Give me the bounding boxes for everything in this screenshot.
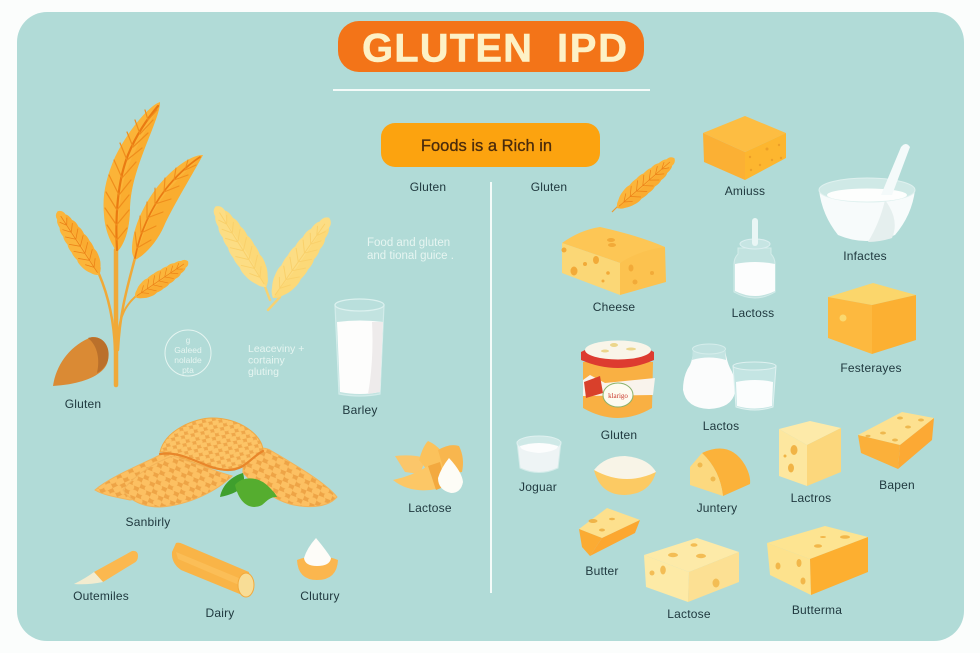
icon: dairy roll <box>172 543 254 597</box>
icon: yellow pieces and clove <box>393 441 463 493</box>
icon: small wheat ear <box>611 151 681 215</box>
label: Gluten <box>65 397 101 411</box>
food item: milk bottle <box>732 218 775 320</box>
label: Infactes <box>843 249 887 263</box>
icon: labelled jar: klarigo <box>608 392 628 400</box>
icon: stick <box>74 551 138 584</box>
text block: circled note <box>165 330 211 376</box>
food item: grain mound <box>95 418 337 529</box>
icon: pale cheese block <box>779 421 841 486</box>
food item: half bowl <box>594 456 656 495</box>
food item: yogurt bowl with spoon <box>819 144 915 263</box>
food item: yellow cube <box>828 283 916 375</box>
food item: jar <box>581 340 655 442</box>
text block: food guide note: Food and gluten <box>367 237 450 249</box>
label: Joguar <box>519 480 557 494</box>
label: Lactoss <box>732 306 774 320</box>
text block: circled note: nolalde <box>174 355 202 365</box>
food item: butter wedge <box>579 508 640 578</box>
label: Lactros <box>791 491 831 505</box>
sub-icon: tall curved ear <box>103 102 160 252</box>
food item: almond seed <box>53 337 109 411</box>
food item: lactose pieces <box>393 441 463 515</box>
text block: leaceviny note: Leaceviny + <box>248 343 304 355</box>
text block: food guide note: and tional guice . <box>367 250 454 262</box>
icon: large orange cheese <box>767 526 868 595</box>
icon: grain mound with leaves <box>95 418 337 507</box>
title: GLUTEN <box>362 26 532 70</box>
icon: cheese wedge <box>562 227 666 295</box>
icon: large pale cheese <box>644 538 739 602</box>
icon: bottle with straw <box>734 218 775 298</box>
text block: leaceviny note: cortainy <box>248 354 286 366</box>
label: Butterma <box>792 603 842 617</box>
food item: cylinder <box>172 543 254 620</box>
label: Lactose <box>667 607 711 621</box>
title: IPD <box>557 26 627 70</box>
icon: seed <box>53 337 109 386</box>
label: Lactos <box>703 419 739 433</box>
subtitle pill: Foods is a Rich in <box>421 137 552 155</box>
food item: round wedge <box>690 449 750 515</box>
icon: butter wedge <box>579 508 640 556</box>
icon: wedge <box>690 449 750 496</box>
label: Sanbirly <box>126 515 170 529</box>
label: Gluten <box>601 428 637 442</box>
icon: cream bowl <box>594 456 656 495</box>
food item: flat cheese <box>858 412 934 492</box>
food item: grain stick <box>73 551 138 603</box>
food item: pale block <box>779 421 841 505</box>
food item: block cheese top <box>703 116 786 198</box>
label: Lactose <box>408 501 452 515</box>
text block: circled note: Galeed <box>174 345 202 355</box>
food item: cream cup <box>297 538 340 603</box>
label: Amiuss <box>725 184 765 198</box>
food item: glass of milk <box>335 299 384 417</box>
icon: jug and glass <box>683 344 776 410</box>
food item: cheese <box>562 227 666 314</box>
icon: cube <box>828 283 916 354</box>
food item: large orange block <box>767 526 868 617</box>
icon: flat cheese block <box>858 412 934 469</box>
label: Festerayes <box>840 361 902 375</box>
label: Barley <box>342 403 378 417</box>
text block: leaceviny note: gluting <box>248 366 279 378</box>
text block: circled note: g <box>186 336 190 345</box>
sub-icon: right curved ear <box>132 155 203 260</box>
subtitle pill <box>381 123 600 167</box>
label: Gluten left column header: Gluten <box>410 180 446 194</box>
label: Outemiles <box>73 589 129 603</box>
label: Juntery <box>697 501 737 515</box>
sub-icon: small side ears <box>48 205 193 305</box>
icon: large wheat plant <box>48 102 203 385</box>
food item: large pale block <box>644 538 739 621</box>
food item: milk jug and glass <box>683 344 776 433</box>
icon: cup <box>517 436 561 472</box>
text block: circled note: pta <box>182 365 194 375</box>
icon: cheese block <box>703 116 786 180</box>
label: Gluten right column header: Gluten <box>531 180 567 194</box>
food item: yogurt cup <box>517 436 561 494</box>
label: Clutury <box>300 589 340 603</box>
label: Butter <box>585 564 619 578</box>
label: Dairy <box>205 606 235 620</box>
icon: bowl <box>819 144 915 242</box>
title <box>338 21 644 72</box>
icon: pale wheat ears <box>205 200 340 310</box>
label: Bapen <box>879 478 915 492</box>
icon: milk glass <box>335 299 384 396</box>
label: Cheese <box>593 300 635 314</box>
icon: cup with cream <box>297 538 338 580</box>
